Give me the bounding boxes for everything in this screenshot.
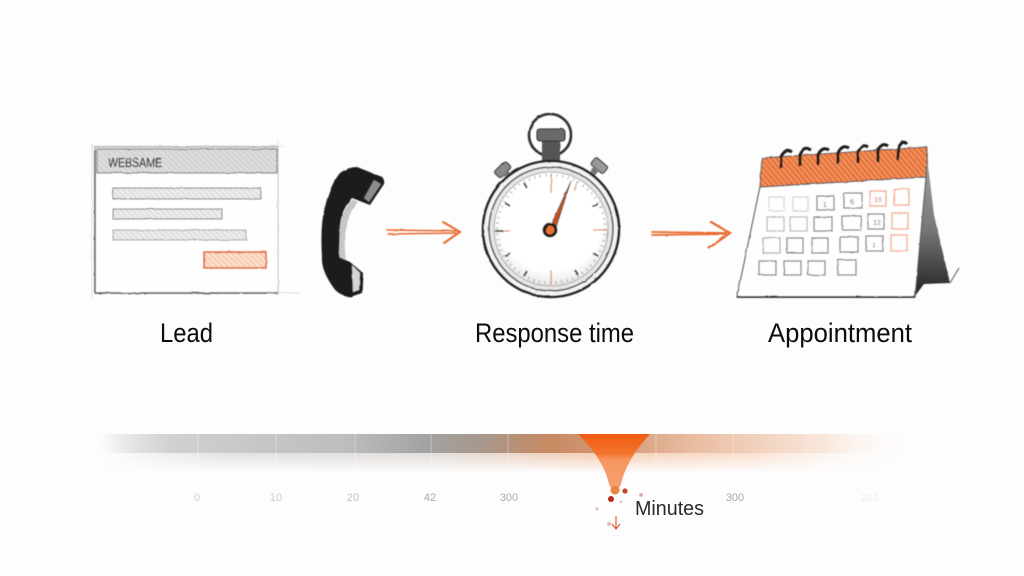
axis labels: [194, 492, 879, 504]
binding rings: [781, 142, 907, 168]
crown ring: [529, 114, 571, 156]
watch body: [483, 161, 619, 297]
axis labels: 10: [270, 492, 282, 504]
peak funnel marker: [578, 434, 650, 490]
date numerals: 12: [873, 220, 881, 227]
arrow: lead to response time: [387, 222, 460, 243]
label: Appointment: Appointment: [768, 318, 912, 348]
axis labels: 42: [424, 492, 436, 504]
timeline bar: [100, 434, 920, 485]
axis labels: 201: [861, 492, 879, 504]
clock hand: [549, 181, 571, 231]
icon: lead form: [90, 140, 300, 298]
date numerals: 10: [874, 197, 882, 204]
icon: stopwatch: [483, 114, 619, 297]
label: Minutes: Minutes: [635, 498, 704, 520]
axis labels: 0: [194, 492, 200, 504]
calendar back pages: [915, 148, 950, 296]
crown cap and stem: [542, 141, 560, 162]
icon: phone handset: [321, 167, 384, 297]
minute ticks: [497, 175, 605, 283]
label: Response time: Response time: [475, 318, 634, 348]
form field 3: [113, 230, 246, 240]
form field 2: [113, 209, 222, 219]
date numerals: 1: [823, 202, 827, 209]
icon: desk calendar: [737, 142, 959, 297]
axis labels: 20: [347, 492, 359, 504]
hand hub: [544, 224, 556, 236]
date numerals: 6: [850, 199, 854, 206]
form field 1: [113, 188, 261, 199]
calendar page: [737, 177, 926, 297]
axis labels: 300: [500, 492, 518, 504]
label: Lead: Lead: [160, 318, 213, 348]
scattered dots and down arrow: [595, 486, 643, 529]
date grid: [759, 189, 909, 275]
right side button: [585, 157, 608, 180]
major ticks: [505, 183, 598, 276]
arrow: response time to appointment: [652, 222, 730, 248]
date numerals: 1: [872, 242, 876, 249]
left side button: [494, 161, 516, 183]
form header text: WEBSAME: [108, 156, 162, 170]
calendar header: [760, 147, 927, 187]
submit button: [204, 252, 266, 268]
axis labels: 300: [726, 492, 744, 504]
date numerals: [823, 197, 882, 249]
